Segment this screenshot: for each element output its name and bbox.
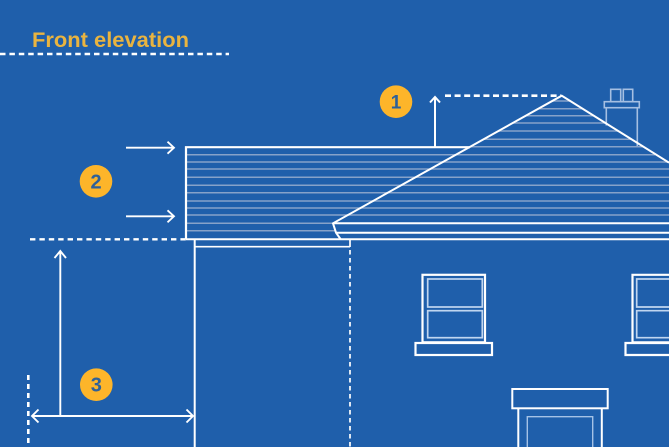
main pitched roof and eaves <box>333 96 669 239</box>
badge 2 <box>80 165 112 198</box>
left window <box>416 275 492 355</box>
title: Front elevation: Front elevation <box>32 29 189 52</box>
badge 1 <box>380 85 412 118</box>
badge 2: 2 <box>90 171 102 193</box>
chimney <box>604 89 639 146</box>
marker 2: wind arrows <box>126 142 174 222</box>
badge 1: 1 <box>391 92 402 114</box>
marker 3: dashed guides and dimension arrows <box>28 239 193 447</box>
badge 3: 3 <box>91 375 102 397</box>
side wall and lintel <box>195 239 350 447</box>
badge 3 <box>80 368 113 401</box>
door with canopy <box>512 389 608 447</box>
flat roof outline <box>186 147 669 239</box>
marker 1: height arrow with dashed guide <box>430 96 561 147</box>
right window <box>626 275 669 355</box>
roof tile hatching <box>187 101 669 231</box>
